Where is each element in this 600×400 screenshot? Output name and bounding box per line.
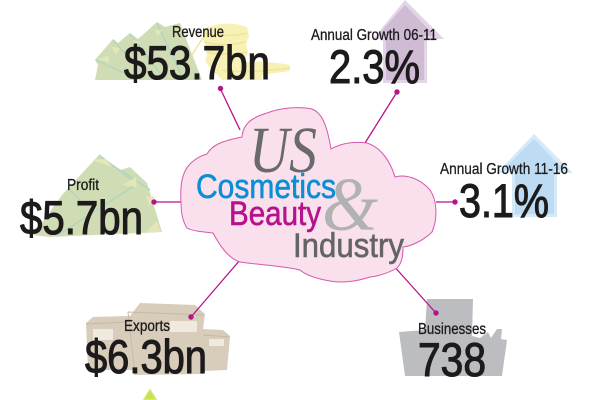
stat: profit: Profit xyxy=(67,177,99,194)
icon: revenue banknotes xyxy=(95,22,202,80)
connector: revenue xyxy=(218,86,240,130)
connector: profit xyxy=(151,199,182,205)
title: ampersand: & xyxy=(322,163,378,247)
stat: annual growth 11-16 xyxy=(440,161,568,227)
icon: profit banknotes xyxy=(33,155,162,237)
panel: central cloud xyxy=(181,108,436,282)
stat: annual growth 11-16: 3.1% xyxy=(459,174,549,227)
icon: export boxes xyxy=(86,303,230,375)
icon: purple growth arrow xyxy=(373,0,444,83)
stat: annual growth 06-11: Annual Growth 06-11 xyxy=(311,27,437,44)
stat: annual growth 11-16: Annual Growth 11-16 xyxy=(440,161,568,178)
stat: profit: $5.7bn xyxy=(20,191,143,244)
stat: profit xyxy=(20,177,143,244)
stat: revenue: $53.7bn xyxy=(124,36,270,89)
stat: businesses: 738 xyxy=(418,333,486,386)
icon: green arrow tip xyxy=(143,389,157,400)
connector: businesses xyxy=(392,264,439,316)
stat: annual growth 06-11: 2.3% xyxy=(329,40,420,93)
stat: annual growth 06-11 xyxy=(311,27,437,93)
title: Industry: Industry xyxy=(293,227,404,265)
connector: annual growth 06-11 xyxy=(365,89,400,143)
stat: exports: Exports xyxy=(124,318,170,335)
stat: businesses: Businesses xyxy=(418,321,486,338)
icon: revenue coins xyxy=(190,23,290,80)
stat: exports: $6.3bn xyxy=(85,330,207,383)
connector: annual growth 11-16 xyxy=(436,199,458,205)
title: Cosmetics: Cosmetics xyxy=(196,168,336,206)
title: Beauty: Beauty xyxy=(229,195,321,233)
icon: business buildings xyxy=(399,299,507,376)
stat: revenue: Revenue xyxy=(172,24,224,41)
title: US: US xyxy=(249,114,317,187)
icon: blue growth arrow xyxy=(497,134,573,217)
connector: exports xyxy=(188,260,240,320)
